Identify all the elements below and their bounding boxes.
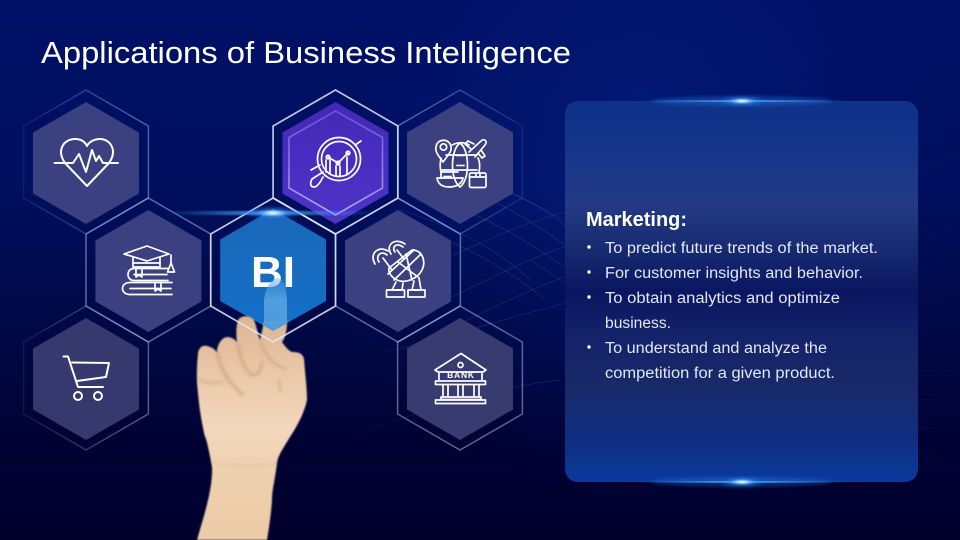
icon: bank building xyxy=(435,354,486,404)
icon: shopping cart xyxy=(64,356,109,400)
lens flare on BI hexagon xyxy=(165,205,375,221)
bullet list: competition for a given product. xyxy=(605,365,835,382)
hexagon: education xyxy=(86,198,211,342)
icon: heart with pulse xyxy=(54,139,118,186)
icon: bank building: BANK xyxy=(447,370,475,380)
hexagon outline: BI xyxy=(211,198,336,342)
panel top flare xyxy=(640,94,845,108)
label: BI: BI xyxy=(251,248,295,297)
title: Applications of Business Intelligence xyxy=(41,35,571,70)
background wave lines xyxy=(340,170,960,470)
bullet list: To obtain analytics and optimize xyxy=(605,290,840,307)
finger and knuckle shading xyxy=(199,342,285,467)
heading: Marketing: Marketing: xyxy=(586,209,687,231)
icon: analytics magnifier xyxy=(311,138,361,187)
bullet list: For customer insights and behavior. xyxy=(605,265,863,282)
bullet list xyxy=(587,240,878,382)
bullet list: To predict future trends of the market. xyxy=(605,240,878,257)
hexagon: transportation and logistics xyxy=(398,90,522,234)
icon: globe with pin, plane, ship and box xyxy=(436,140,486,188)
panel: marketing description xyxy=(565,94,918,488)
hexagon: marketing, selected xyxy=(273,90,398,234)
icon: graduation cap on books xyxy=(122,246,174,294)
fingertip seen through the BI hexagon xyxy=(264,278,287,331)
bullet list: business. xyxy=(605,315,671,332)
hexagon: banking xyxy=(398,306,522,450)
icon: satellite dishes xyxy=(373,241,425,297)
hexagon: healthcare xyxy=(24,90,148,234)
hand pointing at BI hexagon xyxy=(197,316,307,540)
panel bottom flare xyxy=(640,476,845,488)
hexagon: telecommunications xyxy=(336,198,460,342)
hexagon: retail xyxy=(24,306,148,450)
bullet list: To understand and analyze the xyxy=(605,340,827,357)
hexagon: BI fill and label xyxy=(220,209,326,331)
